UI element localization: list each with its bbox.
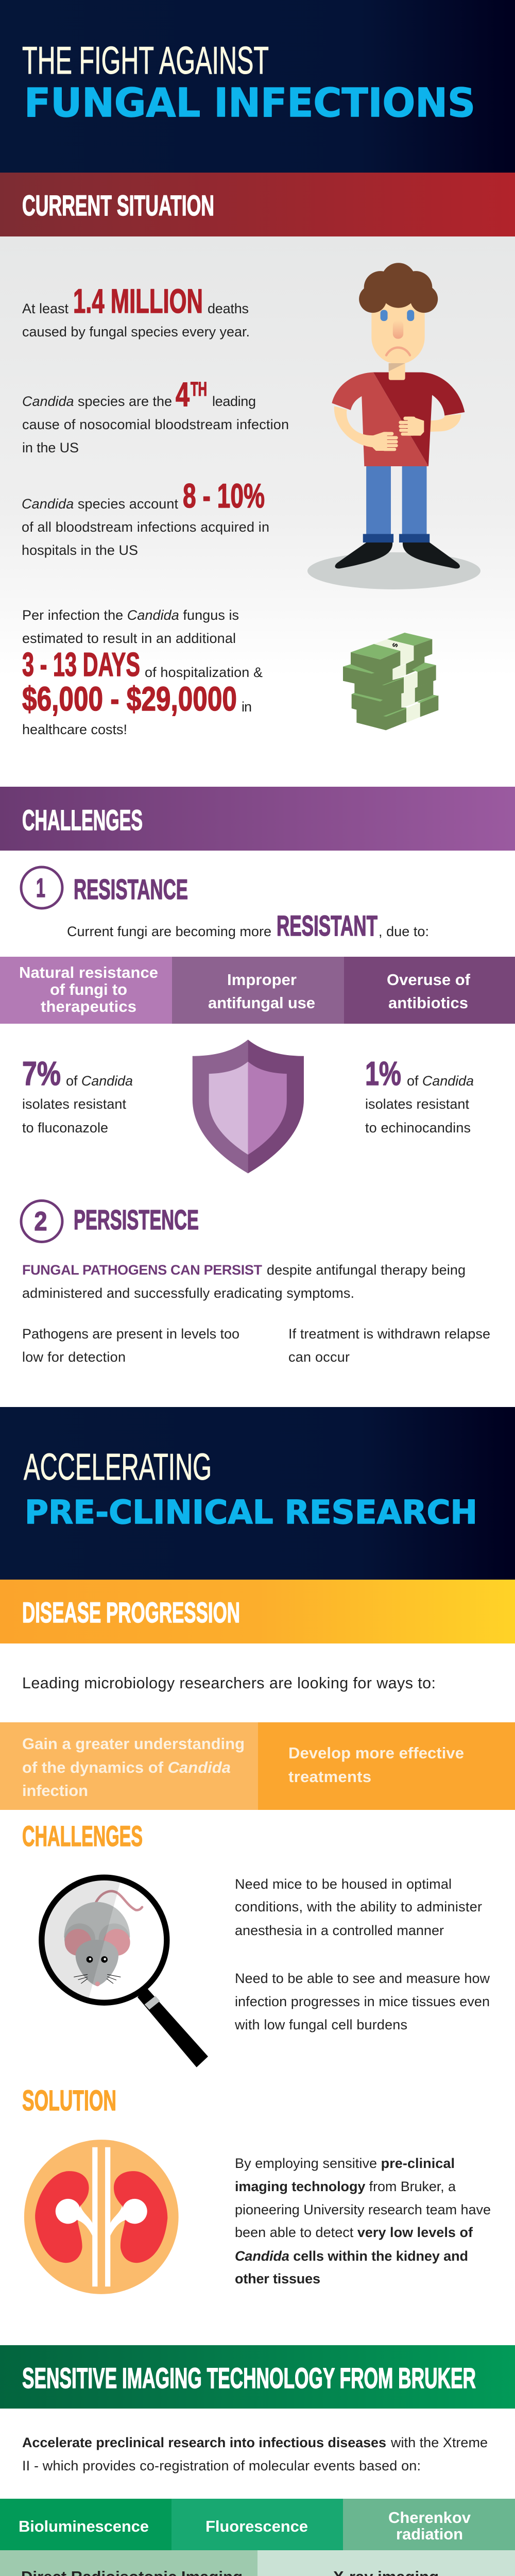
box: bioluminescence: Bioluminescence [19, 2517, 149, 2535]
stat: hospitalization and healthcare costs [22, 607, 263, 737]
stat: 1.4 million deaths: deaths [208, 301, 249, 316]
text: solution description: Candida cells within the kidney and [235, 2248, 468, 2264]
stat: hospitalization and healthcare costs: $6,000 - $29,0000 [22, 680, 237, 718]
box: overuse of antibiotics [344, 957, 515, 1024]
text: challenges for mouse housing: conditions, with the ability to administer [235, 1899, 482, 1914]
text: relapse can occur: can occur [288, 1349, 350, 1365]
heading: 2 persistence: PERSISTENCE [74, 1205, 199, 1235]
heading: solution: SOLUTION [22, 2084, 116, 2116]
box: direct radioisotopic imaging [0, 2550, 258, 2576]
stat: 4th leading cause [22, 375, 289, 455]
box: fluorescence [171, 2499, 343, 2550]
section band: current situation [0, 173, 515, 236]
goals: two orange boxes [0, 1722, 515, 1810]
box: natural resistance: therapeutics [41, 997, 136, 1015]
text: leading researchers intro: Leading microbiology researchers are looking for ways to: [22, 1674, 436, 1692]
text: solution description: other tissues [235, 2271, 320, 2286]
stat: 8-10% of bloodstream infections: of all bloodstream infections acquired in [22, 519, 269, 535]
stat: hospitalization and healthcare costs: Per infection the Candida fungus is [22, 607, 239, 623]
heading: 1 resistance: 1 [36, 873, 45, 903]
heading: challenges: CHALLENGES [22, 1820, 143, 1852]
stat: 4th leading cause: Candida species are the [22, 394, 172, 409]
header: accelerating pre-clinical research [0, 1407, 515, 1580]
heading: 1 resistance [21, 867, 188, 908]
stat: 1.4 million deaths: caused by fungal species every year. [22, 324, 250, 340]
box: improper antifungal use: antifungal use [208, 994, 315, 1012]
resistance causes: three boxes [0, 957, 515, 1024]
text: persistence description [22, 1262, 466, 1301]
stat: 4th leading cause: in the US [22, 440, 79, 455]
text: xtreme ii intro: with the Xtreme [390, 2435, 488, 2450]
stat: 4th leading cause: TH [191, 379, 207, 400]
box: cherenkov radiation: radiation [396, 2525, 463, 2543]
stat: 1% resistant to echinocandins: isolates resistant [365, 1096, 469, 1112]
box: more effective treatments: Develop more effective [288, 1744, 464, 1762]
panel: current situation content [0, 236, 515, 787]
text: fungi becoming more resistant: RESISTANT [277, 909, 377, 942]
text: xtreme ii intro [22, 2435, 488, 2473]
stat: 4th leading cause: leading [212, 394, 256, 409]
box: more effective treatments: treatments [288, 1768, 371, 1786]
text: challenges for measuring infection: Need to be able to see and measure how [235, 1971, 490, 1986]
imaging modalities grid [0, 2499, 515, 2576]
stat: 1.4 million deaths: 1.4 MILLION [73, 282, 203, 320]
box: cherenkov radiation [343, 2499, 515, 2550]
box: greater understanding: infection [22, 1782, 88, 1800]
stat: hospitalization and healthcare costs: in [242, 699, 252, 715]
icon: mouse under magnifying glass [42, 1877, 208, 2067]
stat: 4th leading cause: 4 [176, 375, 190, 413]
stat: 1% resistant to echinocandins [365, 1055, 474, 1136]
icon: kidneys [24, 2140, 179, 2294]
text: challenges for mouse housing: Need mice to be housed in optimal [235, 1876, 452, 1892]
box: natural resistance: of fungi to [50, 980, 127, 998]
text: challenges for measuring infection: with low fungal cell burdens [234, 2017, 407, 2032]
section band: disease progression [0, 1580, 515, 1643]
text: challenges for measuring infection [234, 1971, 490, 2032]
header: accelerating pre-clinical research: PRE-CLINICAL RESEARCH [25, 1494, 477, 1531]
stat: 1.4 million deaths [22, 282, 250, 340]
stat: 8-10% of bloodstream infections: hospitals in the US [22, 543, 138, 558]
box: cherenkov radiation: Cherenkov [388, 2509, 471, 2527]
text: xtreme ii intro: II - which provides co-registration of molecular events based on: [22, 2458, 421, 2473]
stat: 1% resistant to echinocandins: to echinocandins [365, 1120, 471, 1136]
section band: disease progression: DISEASE PROGRESSION [22, 1596, 240, 1629]
text: solution description: pioneering University research team have [235, 2202, 491, 2217]
box: overuse of antibiotics: antibiotics [388, 994, 468, 1012]
stat: 1% resistant to echinocandins: 1% [365, 1055, 401, 1092]
box: x-ray imaging [258, 2550, 515, 2576]
stat: 7% resistant to fluconazole: of Candida [66, 1073, 133, 1089]
box: overuse of antibiotics: Overuse of [387, 971, 471, 989]
text: persistence description: FUNGAL PATHOGENS CAN PERSIST [22, 1262, 263, 1278]
box: improper antifungal use: Improper [227, 971, 297, 989]
text: relapse can occur: If treatment is withdrawn relapse [288, 1326, 490, 1342]
stat: hospitalization and healthcare costs: of hospitalization & [145, 665, 263, 680]
stat: 7% resistant to fluconazole: 7% [22, 1055, 61, 1092]
stat: 4th leading cause: cause of nosocomial bloodstream infection [22, 417, 289, 432]
text: solution description [235, 2156, 491, 2286]
title line 1: THE FIGHT AGAINST [22, 39, 269, 82]
box: greater understanding: of the dynamics of Candida [22, 1758, 231, 1776]
box: greater understanding [0, 1722, 258, 1810]
section band: sensitive imaging technology from bruker [0, 2345, 515, 2409]
icon: stack of money [343, 633, 438, 730]
box: more effective treatments [258, 1722, 515, 1810]
box: fluorescence: Fluorescence [205, 2517, 308, 2535]
text: solution description: imaging technology from Bruker, a [235, 2179, 456, 2194]
text: challenges for mouse housing [235, 1876, 482, 1938]
stat: hospitalization and healthcare costs: estimated to result in an additional [22, 631, 236, 646]
box: natural resistance [0, 957, 172, 1024]
header: accelerating pre-clinical research: ACCELERATING [24, 1447, 212, 1488]
stat: hospitalization and healthcare costs: 3 - 13 DAYS [22, 646, 140, 683]
text: fungi becoming more resistant [67, 909, 429, 942]
text: persistence description: administered and successfully eradicating symptoms. [22, 1285, 354, 1301]
box: bioluminescence [0, 2499, 171, 2550]
text: pathogens levels too low: low for detection [22, 1349, 126, 1365]
heading: 2 persistence: 2 [34, 1207, 47, 1236]
section band: current situation: CURRENT SITUATION [22, 189, 214, 222]
text: pathogens levels too low: Pathogens are present in levels too [22, 1326, 239, 1342]
stat: 8-10% of bloodstream infections: Candida species account [22, 496, 178, 512]
heading: 2 persistence [21, 1200, 199, 1242]
text: solution description: By employing sensitive pre-clinical [235, 2156, 455, 2171]
text: pathogens levels too low [22, 1326, 239, 1365]
stat: hospitalization and healthcare costs: healthcare costs! [22, 722, 127, 737]
text: fungi becoming more resistant: Current fungi are becoming more [67, 924, 271, 939]
box: greater understanding: Gain a greater understanding [22, 1735, 245, 1753]
heading: 1 resistance: RESISTANCE [74, 873, 188, 905]
text: solution description: been able to detect very low levels of [235, 2225, 473, 2240]
text: persistence description: despite antifungal therapy being [267, 1262, 466, 1278]
header: the fight against fungal infections [0, 0, 515, 173]
text: challenges for measuring infection: infection progresses in mice tissues even [235, 1994, 490, 2009]
text: challenges for mouse housing: anesthesia in a controlled manner [235, 1923, 444, 1938]
stat: 7% resistant to fluconazole [22, 1055, 133, 1136]
title line 2: FUNGAL INFECTIONS [24, 80, 475, 126]
box: natural resistance: Natural resistance [19, 963, 158, 981]
section band: challenges [0, 787, 515, 851]
money band dollar sign: $ [390, 642, 400, 648]
text: relapse can occur [288, 1326, 490, 1365]
text: xtreme ii intro: Accelerate preclinical research into infectious diseases [22, 2435, 386, 2450]
stat: 1% resistant to echinocandins: of Candida [407, 1073, 474, 1089]
section band: challenges: CHALLENGES [22, 804, 143, 836]
icon: sick person holding stomach [307, 263, 480, 589]
box: improper antifungal use [172, 957, 344, 1024]
stat: 8-10% of bloodstream infections: 8 - 10% [183, 477, 265, 515]
stat: 8-10% of bloodstream infections [22, 477, 269, 558]
stat: 7% resistant to fluconazole: to fluconazole [22, 1120, 108, 1136]
panel: challenges content [0, 851, 515, 1407]
icon: shield [193, 1040, 304, 1173]
stat: 7% resistant to fluconazole: isolates resistant [22, 1096, 126, 1112]
text: fungi becoming more resistant: , due to: [379, 924, 429, 939]
stat: 1.4 million deaths: At least [22, 301, 68, 316]
